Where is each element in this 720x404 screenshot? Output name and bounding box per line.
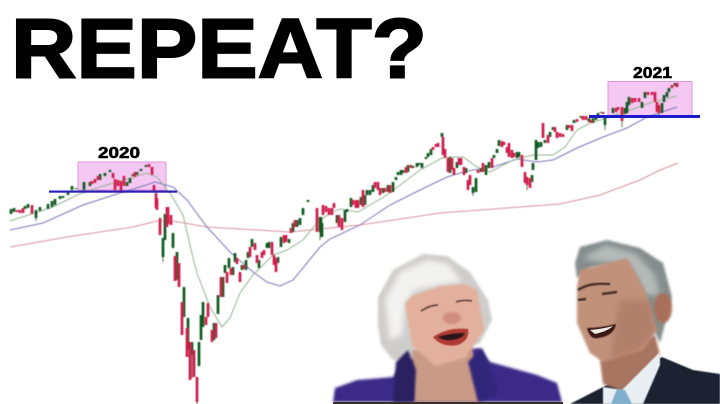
closed eyes <box>421 300 472 311</box>
moving average: slow blue <box>10 107 677 286</box>
chart: price candlesticks and moving averages <box>10 83 678 404</box>
hair <box>575 240 672 343</box>
face <box>405 284 484 366</box>
portrait: laughing woman with white hair <box>333 254 563 404</box>
tie <box>611 389 632 404</box>
collar shadow <box>393 350 416 402</box>
highlight box: 2020 <box>78 162 166 190</box>
suit jacket <box>570 357 720 404</box>
collar right <box>468 348 497 402</box>
teeth <box>590 326 613 334</box>
neck <box>600 335 660 392</box>
hair highlights <box>385 260 462 340</box>
candles: red down days <box>17 83 677 402</box>
highlight box: 2021 <box>608 82 692 116</box>
title: REPEAT? <box>11 2 427 96</box>
white shirt collar <box>603 352 660 404</box>
support line: 2021 <box>589 115 700 118</box>
ear <box>654 293 672 323</box>
label: 2020: 2020 <box>98 145 140 162</box>
face <box>577 258 657 362</box>
neck <box>412 345 480 402</box>
base edge <box>333 402 563 404</box>
jacket <box>333 348 562 402</box>
label: 2021: 2021 <box>633 65 672 82</box>
wicks <box>36 113 659 404</box>
hair <box>378 254 492 360</box>
portrait: laughing man in suit <box>570 240 720 404</box>
mouth opening <box>438 333 465 340</box>
support line: 2020 <box>49 190 177 193</box>
jaw shadow <box>610 300 655 358</box>
hair highlight <box>582 245 660 295</box>
eyes and brows <box>578 284 617 300</box>
moving average: fast green <box>10 96 677 327</box>
mouth <box>433 329 468 346</box>
candles: green up days <box>11 83 675 366</box>
mouth <box>587 324 616 338</box>
nose <box>443 312 461 324</box>
moving average: 200 day pink <box>10 163 678 247</box>
